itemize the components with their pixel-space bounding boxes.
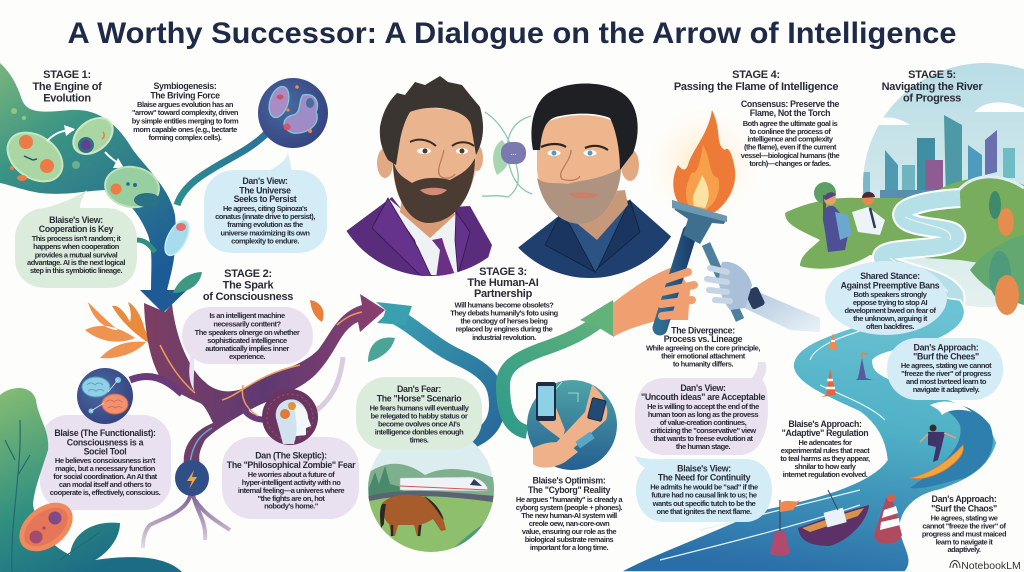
text: shared stance: often backfires. xyxy=(866,322,914,331)
bubble: Blaise the functionalist xyxy=(40,415,171,510)
bubble: Blaise's view (continuity) xyxy=(635,456,772,522)
text: Dan's approach burf: "Burf the Chees" xyxy=(913,352,979,362)
text: Blaise's optimism: biological substrate remains xyxy=(525,535,614,544)
bubble: Dan's view (universe) xyxy=(204,153,327,253)
text: Blaise's approach: to teal harms as they appear, xyxy=(780,454,870,463)
portrait: Blaise xyxy=(345,76,492,285)
text: consensus: intelligence and complexity xyxy=(747,134,834,144)
text: Dan's view uncouth: "Uncouth ideas" are Acceptable xyxy=(641,392,765,402)
text: symbiogenesis: by simple entities merging to form xyxy=(132,116,239,126)
text: shared stance: development bwed on fear of xyxy=(844,306,937,315)
text: machine content: necessarily conttent? xyxy=(213,320,282,328)
text: Dan's view uncouth: criticizing the "conservative" view xyxy=(650,426,756,435)
portrait: Dan xyxy=(515,84,675,290)
stage 3 heading: The Human-AI xyxy=(467,277,539,289)
stage 3 heading: Partnership xyxy=(474,288,533,300)
stage 4 heading: STAGE 4: xyxy=(732,69,780,81)
text: Dan's approach surf: "Surf the Chaos" xyxy=(931,504,997,514)
text: humans obsolete: They debats humanily's foto using xyxy=(450,308,559,318)
stage 4 heading: Passing the Flame of Intelligence xyxy=(674,81,838,93)
text: divergence: While agreeing on the core principle, xyxy=(646,344,760,352)
bubble: shared stance xyxy=(825,261,947,335)
icon: hand holding torch xyxy=(613,200,727,337)
title: A Worthy Successor: A Dialogue on the Arrow of Intelligence xyxy=(68,17,956,50)
text: Blaise's approach: experimental rules that react xyxy=(781,446,870,455)
text: Dan's fear: times. xyxy=(410,436,429,444)
text: Dan's view uncouth: the human stage. xyxy=(676,442,730,451)
text: shared stance: Shared Stance: xyxy=(860,271,920,281)
text: Blaise's view continuity: The Need for Continuity xyxy=(658,472,751,482)
illustration: horse and train xyxy=(368,442,494,552)
icon: two brains xyxy=(77,368,133,424)
text: Dan skeptic: hyper-intelligent activity with no xyxy=(242,478,341,487)
text: humans obsolete: industrial revolution. xyxy=(472,333,536,342)
text: Dan's view universe: universe maximizing its own xyxy=(220,228,310,238)
stage 1 heading: Evolution xyxy=(43,92,91,104)
text: Blaise's optimism: value, ensuring our role as the xyxy=(522,527,616,536)
stage 5 heading: STAGE 5: xyxy=(908,69,956,81)
text: Blaise functionalist: can modal itself and others to xyxy=(59,480,152,489)
beard xyxy=(393,158,475,223)
leaf xyxy=(368,337,395,362)
trees xyxy=(814,182,836,204)
text: Dan's view universe: complexity to endure. xyxy=(231,236,299,246)
text: Blaise's optimism: important for a long time. xyxy=(530,543,608,552)
text: Dan's fear: be relegated to habby status or xyxy=(371,412,468,420)
text: divergence: their emotional attachment xyxy=(661,352,746,360)
text: Blaise's approach: "Adaptive" Regulation xyxy=(782,428,868,438)
text: Blaise's view continuity: one that ignites the next flame. xyxy=(657,507,752,516)
text: Dan's view universe: The Universe xyxy=(239,186,291,196)
text: Blaise functionalist: Blaise (The Functionalist): xyxy=(54,428,156,438)
icon: spark node xyxy=(175,460,209,496)
text: Dan skeptic: He worries about a future of xyxy=(248,470,335,479)
text: Blaise's view continuity: wants out specific tutch to be the xyxy=(652,499,756,508)
icon: dialogue: ... xyxy=(511,150,516,157)
brows, eyes xyxy=(541,144,608,150)
text: consensus: (the flame), even if the current xyxy=(744,142,837,152)
bubble: Blaise's view xyxy=(15,190,137,288)
bubble: Dan's view (uncouth) xyxy=(635,362,768,455)
text: Blaise's view cooperation: happens when cooperation xyxy=(33,242,120,251)
stage 2 heading: of Consciousness xyxy=(203,291,293,303)
text: Blaise's optimism: creole oew, nan-core-own xyxy=(529,519,610,528)
text: Blaise's approach: Blaise's Approach: xyxy=(788,419,862,429)
text: Blaise's optimism: The new human-AI system will xyxy=(521,511,617,520)
text: machine content: The speakers olnerge on whether xyxy=(195,328,300,337)
text: Dan's approach surf: learn to navigate it xyxy=(936,538,993,546)
text: symbiogenesis: Blaise argues evolution has an xyxy=(137,100,234,109)
river xyxy=(620,198,997,572)
clouds xyxy=(870,102,1024,125)
text: Dan's approach burf: Dan's Approach: xyxy=(914,342,979,352)
stubble xyxy=(537,168,621,224)
text: Blaise's view continuity: He admits he would be "sad" if the xyxy=(650,482,758,492)
text: consensus: vessel—biological humans (the xyxy=(741,151,840,160)
text: Dan's view uncouth: that wants to freese evolution at xyxy=(653,434,754,443)
text: Blaise's view continuity: future had no causal link to us; he xyxy=(651,490,757,500)
icon: cones and buoys xyxy=(821,333,873,397)
text: Dan's view uncouth: Dan's View: xyxy=(680,383,726,393)
text: consensus: Flame, Not the Torch xyxy=(750,108,830,118)
skyline xyxy=(860,115,1015,200)
text: Dan's view universe: Seeks to Persist xyxy=(234,194,297,204)
text: Dan's approach burf: and most bvrteed learn to xyxy=(906,377,987,386)
icon: wave and surfer xyxy=(910,401,993,488)
text: machine content: sophisticated intelligence xyxy=(207,336,287,345)
text: Blaise's view cooperation: advantage. AI is the next logical xyxy=(27,258,125,267)
text: Blaise functionalist: He believes consciousness isn't xyxy=(55,456,156,465)
text: divergence: to humanity differs. xyxy=(673,360,733,368)
text: Blaise's view cooperation: Cooperation is Key xyxy=(39,224,114,234)
stage 2 tree xyxy=(85,294,385,548)
text: Dan's approach burf: He agrees, stating we cannot xyxy=(901,361,992,370)
tablet xyxy=(588,398,606,421)
text: machine content: automatically implies inner xyxy=(205,344,289,353)
icon: boat and buoys xyxy=(770,490,902,556)
text: shared stance: the unknown, arguing it xyxy=(853,314,928,323)
text: machine content: experience. xyxy=(229,352,265,361)
icon: robot head with gears xyxy=(262,389,318,445)
text: humans obsolete: Will humans become obsolets? xyxy=(455,300,554,310)
text: shared stance: Both speakers strongly xyxy=(853,290,928,299)
text: humans obsolete: the oncIogy of herses being xyxy=(461,316,548,326)
text: Dan's view universe: He agrees, citing Spinoza's xyxy=(223,204,307,213)
text: consensus: Consensus: Preserve the xyxy=(741,99,840,109)
text: consensus: to conlinee the process of xyxy=(750,127,831,136)
text: shared stance: eppose trying to stop AI xyxy=(853,298,928,307)
text: Dan skeptic: "the fights are on, hot xyxy=(258,494,325,503)
text: Blaise's approach: He adencates for xyxy=(799,438,852,447)
text: Blaise functionalist: Sociel Tool xyxy=(84,446,126,456)
lower river xyxy=(620,295,997,572)
phone xyxy=(536,382,556,421)
stage 3 heading: STAGE 3: xyxy=(479,266,527,278)
illustration: stage 5 city and land xyxy=(785,63,1024,315)
icon: orange cell xyxy=(10,493,82,561)
text: Blaise functionalist: for social coordination. An AI that xyxy=(53,472,158,481)
text: Blaise functionalist: Consciousness is a xyxy=(67,438,144,448)
text: humans obsolete: replaced by engines during the xyxy=(456,324,553,334)
text: symbiogenesis: Symbiogenesis: xyxy=(154,81,217,91)
upper river xyxy=(882,198,960,315)
orange leaves xyxy=(85,300,324,358)
text: consensus: torch)—changes or fades. xyxy=(749,159,831,168)
text: Blaise functionalist: magic, but a necessary function xyxy=(55,464,156,473)
stage 3 streams xyxy=(368,300,614,441)
bubble: Dan's fear xyxy=(356,377,482,450)
leaf on stem xyxy=(173,272,202,293)
text: machine content: Is an intelligent machine xyxy=(209,311,285,320)
text: Dan skeptic: Dan (The Skeptic): xyxy=(255,450,327,460)
text: Dan's view universe: framing evolution as the xyxy=(227,220,303,229)
bottom left foliage xyxy=(0,388,182,572)
hair xyxy=(531,84,638,170)
bubble: Dan's approach burf xyxy=(887,338,1003,400)
text: Blaise's approach: shnilar to how early xyxy=(794,462,857,471)
illustration: flame xyxy=(641,103,765,227)
figures: human and android xyxy=(823,192,885,252)
text: Dan's fear: He fears humans will eventually xyxy=(370,404,470,412)
text: Dan skeptic: nobody's home." xyxy=(264,502,319,510)
text: Dan's view uncouth: of value-creation continues, xyxy=(660,418,747,427)
stage 1 heading: STAGE 1: xyxy=(43,69,91,81)
text: Blaise's optimism: He argues "humanity" is cIready a xyxy=(516,495,623,504)
text: Dan's approach surf: adaptively. xyxy=(947,545,981,554)
text: Dan's approach burf: navigate it adaptively. xyxy=(913,385,980,394)
text: Dan's approach surf: He agrees, stating we xyxy=(931,514,998,522)
stage 1 heading: The Engine of xyxy=(32,81,102,93)
icon: merging cells xyxy=(0,108,194,259)
text: Blaise's view continuity: Blaise's View: xyxy=(677,464,731,474)
icon: symbiosis circle xyxy=(258,78,328,148)
text: Dan's approach surf: progress and must maiced xyxy=(922,530,1007,538)
bubble: Dan the skeptic xyxy=(222,437,359,519)
stage 5 heading: of Progress xyxy=(903,92,961,104)
text: Blaise's optimism: The "Cyborg" Reality xyxy=(528,485,610,495)
icon: dialogue xyxy=(482,112,532,197)
text: Blaise's view cooperation: step in this symbiotic lineage. xyxy=(30,266,122,275)
text: Dan's fear: The "Horse" Scenario xyxy=(377,394,462,404)
text: Dan skeptic: The "Philosophical Zombie" Fear xyxy=(227,460,356,470)
stage 2 heading: STAGE 2: xyxy=(224,268,272,280)
text: Blaise's optimism: cyborg system (people + phones). xyxy=(516,503,623,512)
text: divergence: Process vs. Lineage xyxy=(664,334,743,344)
stage 5 heading: Navigating the River xyxy=(882,81,983,93)
text: Dan's view universe: Dan's View: xyxy=(242,176,288,186)
text: Blaise's approach: internet regulation evolved. xyxy=(783,470,868,479)
logo: NotebookLM: NotebookLM xyxy=(961,560,1021,572)
text: Blaise's view cooperation: This process isn't random; it xyxy=(32,234,121,243)
text: shared stance: Against Preemptive Bans xyxy=(841,280,940,290)
stage 2 heading: The Spark xyxy=(223,280,274,292)
brows and eyes xyxy=(410,140,474,146)
text: Dan's approach surf: Dan's Approach: xyxy=(932,494,997,504)
text: Blaise's optimism: Blaise's Optimism: xyxy=(532,476,606,486)
text: Dan's view universe: conatus (innate drive to persist), xyxy=(215,212,315,221)
text: Dan's fear: intelligence donbles enough xyxy=(375,428,464,436)
text: Dan's fear: become ovolves once AI's xyxy=(378,420,460,428)
icon: robot hand xyxy=(706,244,820,332)
text: Dan's approach surf: cannot "freeze the river" of xyxy=(922,522,1007,530)
icon: horse xyxy=(380,495,446,536)
text: Dan's approach burf: "freeze the river" of progress xyxy=(901,369,991,378)
text: Blaise's view cooperation: provides a mutual survival xyxy=(35,250,118,260)
text: symbiogenesis: "arrow" toward complexity, driven xyxy=(132,108,239,117)
text: Dan's view uncouth: human toon as long as the provess xyxy=(648,410,758,419)
text: Dan's fear: Dan's Fear: xyxy=(397,384,441,394)
bubble: is a machine content xyxy=(182,307,313,364)
stage 1 stream with arrow xyxy=(0,63,272,313)
illustration: cyborg arm and phone xyxy=(527,380,617,470)
text: symbiogenesis: forming complex cells). xyxy=(149,133,222,142)
text: Blaise functionalist: cooperate is, effectively, conscious. xyxy=(50,488,161,497)
text: symbiogenesis: morn capable ones (e.g., bectarte xyxy=(133,125,237,134)
text: Dan's view uncouth: He is willing to accept the end of the xyxy=(647,402,759,411)
text: Blaise's view cooperation: Blaise's View: xyxy=(49,215,103,225)
text: Dan skeptic: internal feeling—a univeres where xyxy=(238,486,344,495)
text: divergence: The Divergence: xyxy=(671,326,735,336)
text: consensus: Both agree the ultimate goal is xyxy=(743,119,838,128)
text: symbiogenesis: The Briving Force xyxy=(150,90,220,100)
hair xyxy=(380,76,483,165)
